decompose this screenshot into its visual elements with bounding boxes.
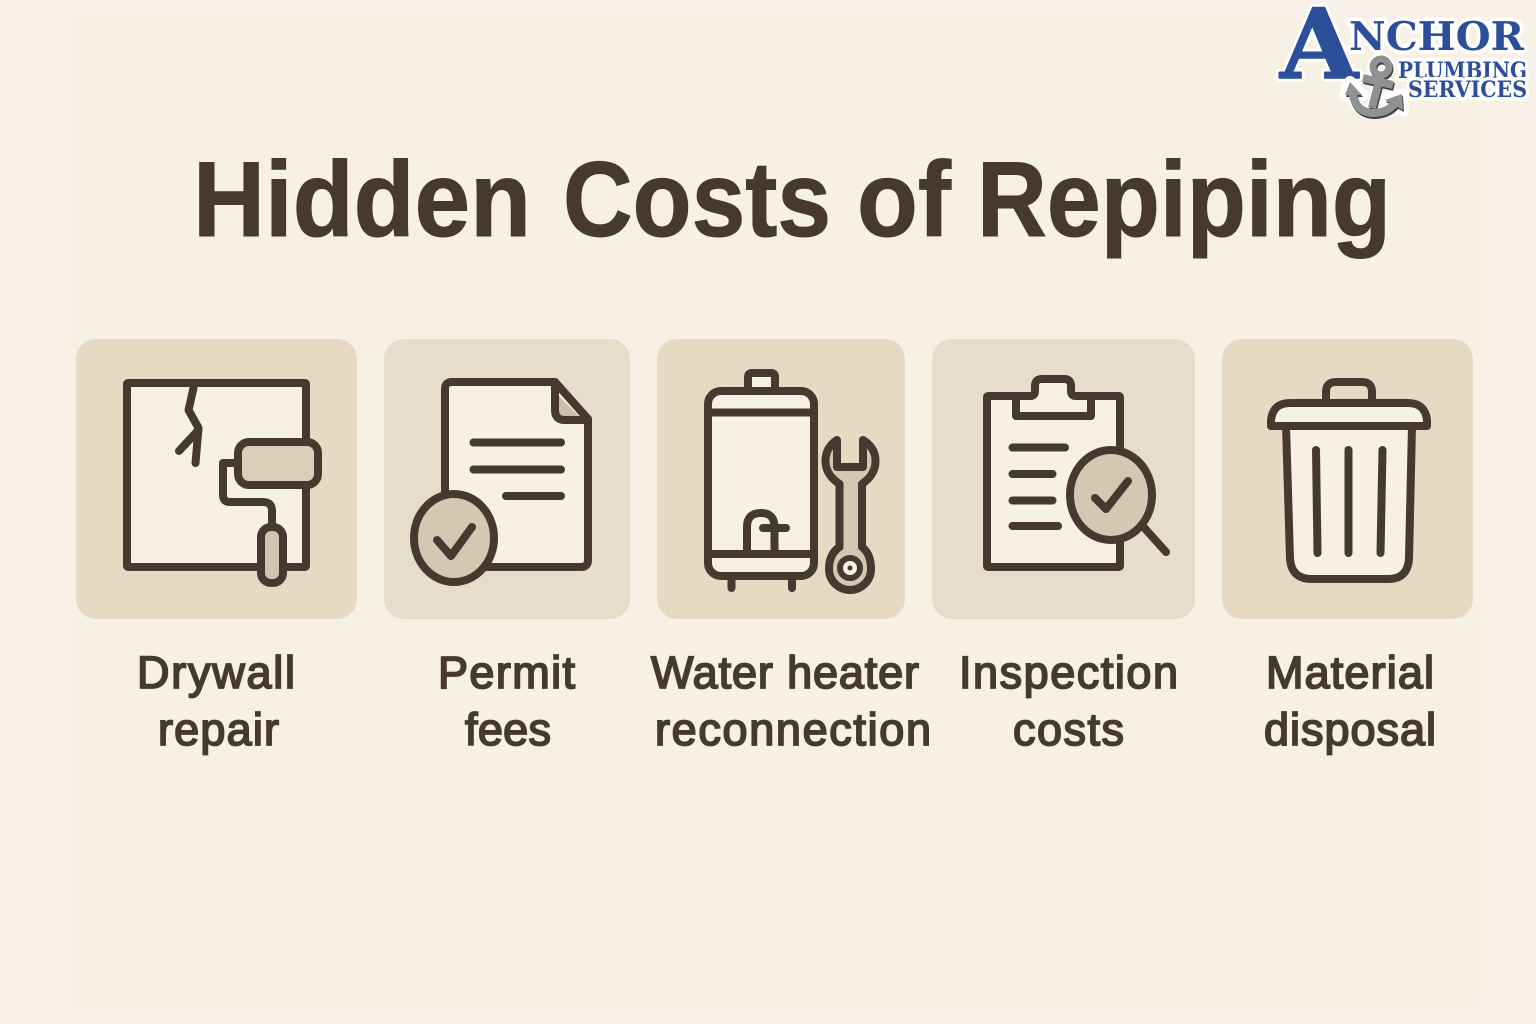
label: Water heater reconnection: Water heater [651,647,919,698]
icon: trash can [1271,382,1427,579]
label: Permit fees: fees [465,704,551,755]
icon: permit document with check badge [414,382,588,582]
title: of [857,139,951,259]
panel background [76,339,357,619]
panel: water heater reconnection [651,339,931,755]
label: Drywall repair [137,647,295,755]
label: Inspection costs [959,647,1178,755]
panel: permit fees [384,339,630,755]
label: Material disposal: Material [1266,647,1434,698]
panel: drywall repair [76,339,357,755]
panel: inspection costs [932,339,1195,755]
logo: Anchor Plumbing Services [1279,0,1527,115]
logo anchor icon [1345,59,1404,115]
label: Drywall repair: Drywall [137,647,295,698]
label: Drywall repair: repair [158,704,279,755]
logo wordmark [1279,0,1527,103]
icon: cracked wall and paint roller [127,383,318,583]
logo wordmark: PLUMBING [1398,58,1527,84]
panel background [657,339,905,619]
title: Costs [563,139,831,259]
title [193,139,1391,259]
panel: material disposal [1222,339,1473,755]
label: Material disposal: disposal [1264,704,1436,755]
icon: water heater and wrench [708,373,876,590]
logo wordmark: SERVICES [1408,77,1527,103]
label: Inspection costs: Inspection [959,647,1178,698]
label: Permit fees: Permit [438,647,575,698]
panel background [932,339,1195,619]
title: Repiping [977,139,1391,259]
label: Permit fees [438,647,575,755]
logo wordmark: NCHOR [1349,14,1525,60]
label: Material disposal [1264,647,1436,755]
panel background [384,339,630,619]
label: Water heater reconnection: reconnection [655,704,931,755]
label: Water heater reconnection [651,647,931,755]
panel background [1222,339,1473,619]
label: Inspection costs: costs [1013,704,1124,755]
title: Hidden [193,139,531,259]
icon: clipboard with magnifier [987,379,1166,567]
